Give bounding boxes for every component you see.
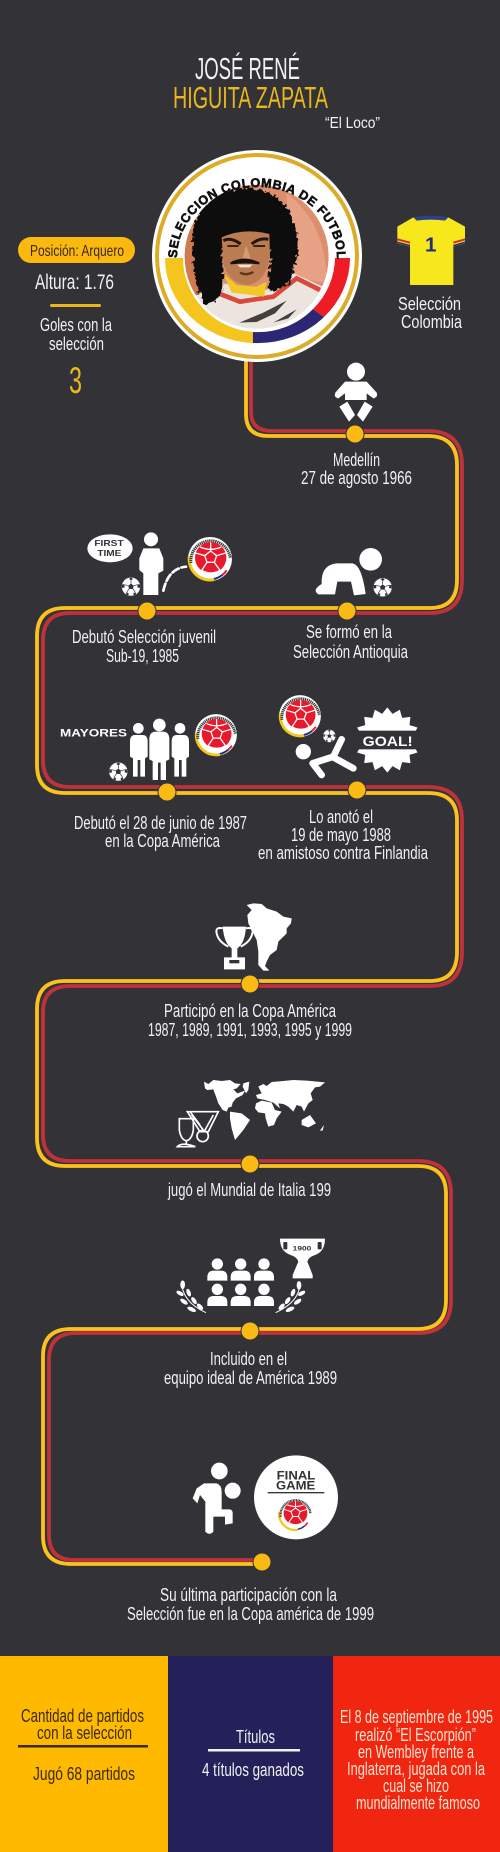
text: Antioquia: Selección Antioquia bbox=[293, 642, 409, 662]
icon: first time debut: FIRST bbox=[94, 538, 124, 548]
icon: jersey bbox=[397, 216, 465, 285]
title: HIGUITA ZAPATA bbox=[173, 80, 328, 115]
icon: final game bbox=[193, 1455, 338, 1539]
title: JOSÉ RENÉ bbox=[195, 51, 300, 86]
icon: goal: GOAL! bbox=[363, 733, 413, 749]
icon: baby bbox=[335, 363, 377, 422]
text: youth debut: Sub-19, 1985 bbox=[106, 646, 179, 666]
goals stat: 3 bbox=[69, 360, 82, 401]
portrait bbox=[183, 185, 330, 340]
text: Copa América: Participó en la Copa América bbox=[164, 1001, 337, 1021]
title bbox=[173, 51, 380, 132]
text: senior debut: en la Copa América bbox=[105, 831, 221, 851]
text: last appearance: Su última participación con la bbox=[160, 1585, 338, 1605]
arc lettering: SELECCION COLOMBIA DE FUTBOL bbox=[168, 178, 346, 259]
text: goal details: 19 de mayo 1988 bbox=[291, 825, 391, 845]
panel: matches: con la selección bbox=[37, 1723, 132, 1743]
text: Antioquia: Se formó en la bbox=[306, 622, 393, 642]
text: ideal team: equipo ideal de América 1989 bbox=[164, 1368, 337, 1388]
text: last appearance: Selección fue en la Copa américa de 1999 bbox=[127, 1604, 374, 1624]
text: Copa América: 1987, 1989, 1991, 1993, 1995 y 1999 bbox=[148, 1020, 352, 1040]
text: youth debut bbox=[72, 627, 216, 666]
icon: ideal team bbox=[176, 1239, 325, 1313]
text: Mundial: jugó el Mundial de Italia 199 bbox=[167, 1180, 331, 1200]
position pill bbox=[18, 237, 135, 263]
goals stat: Goles con la bbox=[40, 315, 113, 335]
icon: trophy and South America bbox=[216, 903, 292, 971]
text: Antioquia bbox=[293, 622, 409, 662]
icon: first time debut: TIME bbox=[97, 548, 122, 558]
timeline dots bbox=[138, 425, 366, 1571]
text: ideal team: Incluido en el bbox=[210, 1349, 287, 1369]
icon: first time debut bbox=[87, 532, 232, 596]
jersey label: Selección bbox=[398, 294, 461, 314]
panel: matches: Cantidad de partidos bbox=[21, 1706, 144, 1726]
jersey label: Colombia bbox=[401, 312, 463, 332]
text: last appearance bbox=[127, 1585, 374, 1624]
text: birth: Medellín bbox=[333, 450, 380, 470]
icon: mayores team: MAYORES bbox=[60, 728, 127, 740]
goals stat bbox=[40, 315, 113, 401]
icon: final game: GAME bbox=[276, 1478, 315, 1492]
text: senior debut: Debutó el 28 de junio de 1987 bbox=[74, 813, 247, 833]
icon: final game: FINAL bbox=[277, 1468, 315, 1482]
text: senior debut bbox=[74, 813, 247, 851]
divider bbox=[50, 304, 101, 307]
icon: world map and medal bbox=[177, 1080, 325, 1147]
height stat: Altura: 1.76 bbox=[35, 271, 114, 294]
title: “El Loco” bbox=[325, 115, 380, 132]
panel: titles bbox=[168, 1656, 333, 1852]
panel: scorpion bbox=[333, 1656, 500, 1852]
text: birth: 27 de agosto 1966 bbox=[301, 468, 412, 488]
panel: titles: 4 títulos ganados bbox=[202, 1760, 304, 1780]
icon: jersey: 1 bbox=[425, 234, 436, 257]
timeline path bbox=[37, 350, 462, 1564]
colour band bbox=[165, 258, 253, 343]
panel: scorpion: cual se hizo bbox=[383, 1776, 449, 1796]
text: ideal team bbox=[164, 1349, 337, 1388]
jersey label bbox=[398, 294, 463, 332]
text: Copa América bbox=[148, 1001, 352, 1040]
position pill: Posición: Arquero bbox=[30, 243, 124, 260]
text: goal details: en amistoso contra Finlandia bbox=[258, 843, 429, 863]
text: goal details bbox=[258, 807, 429, 863]
text: youth debut: Debutó Selección juvenil bbox=[72, 627, 216, 647]
text: birth bbox=[301, 450, 412, 488]
medallion: Selección Colombia de Fútbol bbox=[152, 150, 362, 362]
icon: goal bbox=[279, 695, 422, 775]
panel: titles: Títulos bbox=[236, 1727, 275, 1747]
goals stat: selección bbox=[49, 334, 104, 354]
panel: matches bbox=[0, 1656, 168, 1852]
panel: matches: Jugó 68 partidos bbox=[33, 1764, 135, 1784]
icon: crawling baby bbox=[316, 548, 392, 597]
icon: mayores team bbox=[60, 714, 237, 781]
icon: ideal team: 1900 bbox=[293, 1246, 312, 1253]
text: goal details: Lo anotó el bbox=[309, 807, 373, 827]
